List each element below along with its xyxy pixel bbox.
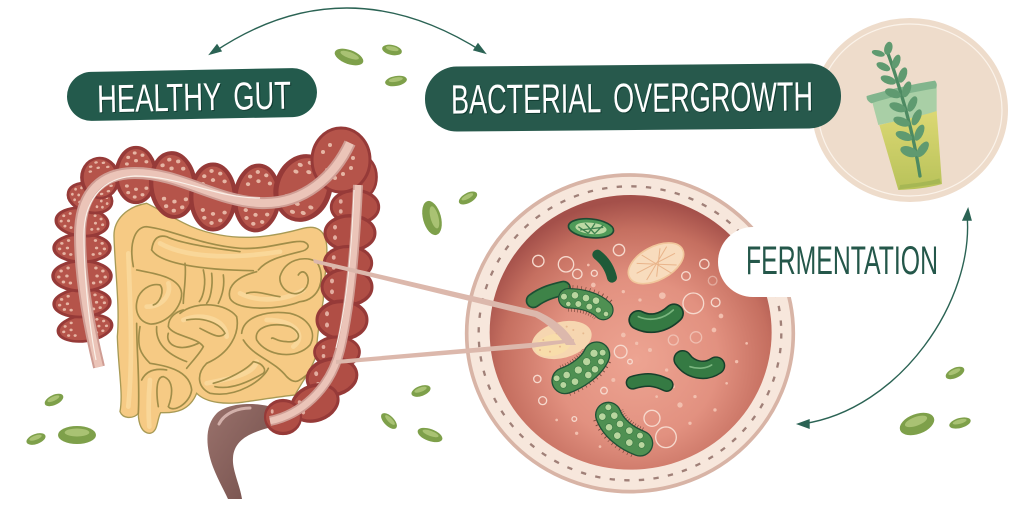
dotted bacterium bottom bbox=[599, 404, 645, 448]
rectum bbox=[207, 404, 268, 499]
dotted bacterium upper bbox=[561, 292, 609, 317]
heading: healthy gut: HEALTHY GUT bbox=[97, 75, 291, 121]
icon: herbal drink medallion bbox=[812, 18, 1008, 202]
rod bacterium left bbox=[533, 288, 563, 301]
panel: magnified gut lumen bbox=[467, 175, 958, 492]
heading: bacterial overgrowth bbox=[425, 63, 841, 132]
fermentation label bbox=[718, 227, 958, 297]
ring wall bbox=[467, 175, 793, 492]
food particle bbox=[622, 235, 690, 292]
dotted bacterium centre-left bbox=[553, 349, 606, 388]
illustration: digestive tract bbox=[53, 128, 379, 499]
heading: healthy gut: HEALTHY GUT bbox=[98, 76, 292, 122]
small particles bbox=[555, 264, 748, 448]
lumen bbox=[490, 195, 772, 470]
heading: bacterial overgrowth: BACTERIAL OVERGROWTH bbox=[452, 74, 814, 124]
icon: cup with sprig bbox=[867, 41, 942, 190]
large intestine pouches bbox=[53, 128, 379, 434]
heading: healthy gut bbox=[67, 68, 317, 123]
arrow: healthy gut to bacterial overgrowth bbox=[210, 8, 485, 54]
colon inner tube bbox=[80, 143, 358, 421]
pale food particle bbox=[527, 315, 596, 365]
rod bacterium top bbox=[597, 255, 612, 278]
connector lines: intestine to lumen bbox=[313, 259, 576, 364]
heading: bacterial overgrowth: BACTERIAL OVERGROWTH bbox=[451, 73, 813, 123]
banana bacterium right bbox=[683, 359, 716, 370]
small intestine bbox=[114, 203, 327, 433]
rod bacterium lower bbox=[633, 380, 667, 385]
arrow: fermentation cycle bbox=[798, 209, 971, 428]
banana bacterium centre bbox=[638, 310, 674, 323]
striped bacterium bbox=[567, 217, 615, 240]
bubbles bbox=[533, 244, 720, 448]
decorative seeds bbox=[25, 43, 972, 447]
